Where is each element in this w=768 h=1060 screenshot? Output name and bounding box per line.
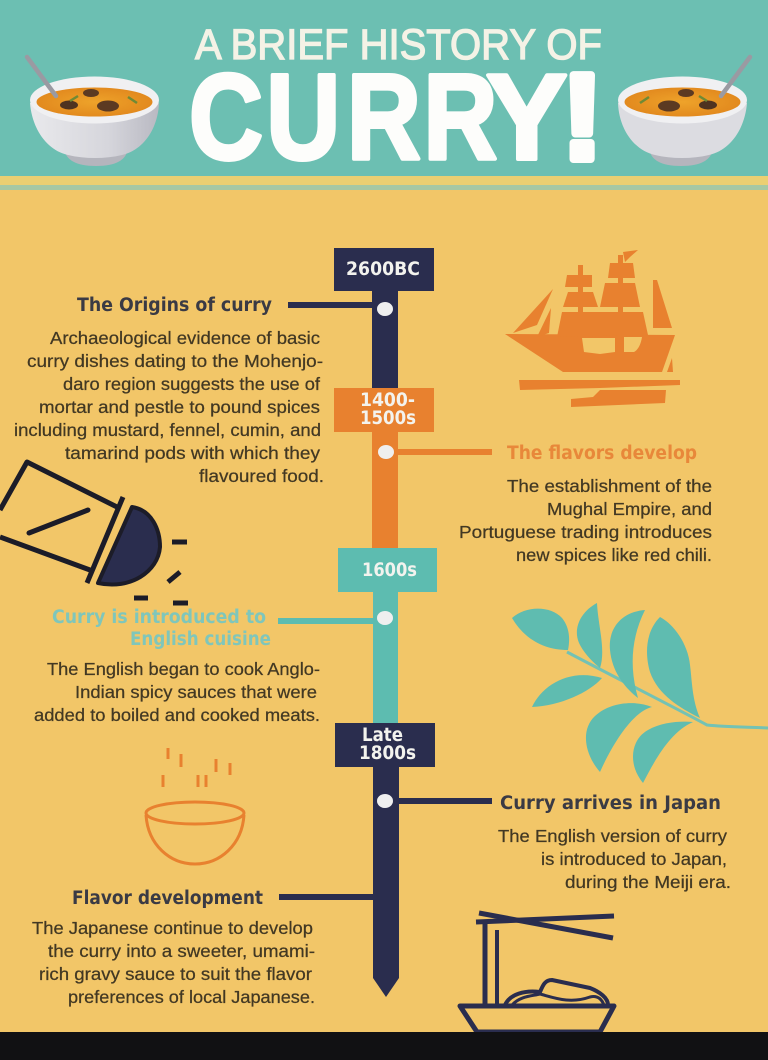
connector: flavors (398, 449, 492, 455)
date box: 1400-1500s (334, 388, 434, 432)
body text: mortar and pestle to pound spices (39, 397, 320, 417)
connector: english (278, 618, 373, 624)
connector: flavor development (279, 894, 373, 900)
heading: Curry arrives in Japan (500, 793, 721, 814)
heading: Curry is introduced to (52, 607, 266, 628)
body text (14, 328, 324, 486)
body text (32, 918, 315, 1007)
body text: curry dishes dating to the Mohenjo- (27, 351, 323, 371)
dot: english (377, 611, 393, 625)
icon: left curry bowl (27, 57, 159, 166)
body text: during the Meiji era. (565, 872, 731, 892)
title line: curry: ! (562, 49, 603, 185)
body text: new spices like red chili. (516, 545, 712, 565)
body text: The establishment of the (507, 476, 712, 496)
connector: origins (288, 302, 372, 308)
body text (34, 659, 320, 725)
connector: japan (398, 798, 492, 804)
body text: including mustard, fennel, cumin, and (14, 420, 321, 440)
timeline (278, 248, 492, 997)
date box: late 1800s: 1800s (359, 743, 416, 764)
icon: noodles and chopsticks (460, 913, 614, 1032)
body text: The English began to cook Anglo- (47, 659, 320, 679)
header banner (0, 0, 768, 190)
icon: leaf branch (512, 603, 768, 783)
body text: is introduced to Japan, (541, 849, 727, 869)
dot: flavors (378, 445, 394, 459)
body text: added to boiled and cooked meats. (34, 705, 320, 725)
timeline stem: flavors (372, 432, 398, 548)
body text: Archaeological evidence of basic (50, 328, 320, 348)
heading: Flavor development (72, 888, 263, 909)
body text: Portuguese trading introduces (459, 522, 712, 542)
body text: tamarind pods with which they (65, 443, 320, 463)
title line: curry: Y (486, 49, 567, 185)
footer bar (0, 1032, 768, 1060)
body text: daro region suggests the use of (63, 374, 320, 394)
body text (498, 826, 731, 892)
body text (459, 476, 712, 565)
title line: a brief history of: A BRIEF HISTORY OF (195, 21, 602, 69)
heading: English cuisine (130, 629, 271, 650)
body text: flavoured food. (199, 466, 324, 486)
date box: 1400-1500s: 1400- (360, 390, 415, 411)
date box: late 1800s: Late (362, 725, 403, 746)
timeline stem: origins (372, 291, 398, 388)
timeline stem: japan with arrow tip (373, 767, 399, 997)
text block: curry is introduced to english cuisine (34, 607, 320, 725)
body text: Mughal Empire, and (547, 499, 712, 519)
body text: Indian spicy sauces that were (75, 682, 317, 702)
body text: The Japanese continue to develop (32, 918, 313, 938)
body text: preferences of local Japanese. (68, 987, 315, 1007)
icon: steaming bowl (146, 748, 244, 864)
icon: sailing ship (505, 250, 680, 407)
date box: 2600BC: 2600BC (346, 259, 420, 280)
heading: The flavors develop (507, 443, 697, 464)
icon: right curry bowl (618, 57, 750, 166)
text block: flavor development (32, 888, 315, 1007)
date box: 1600s (338, 548, 437, 592)
text block: the flavors develop (459, 443, 712, 565)
body text: The English version of curry (498, 826, 727, 846)
date box: 1400-1500s: 1500s (360, 408, 416, 429)
dot: origins (377, 302, 393, 316)
body text: rich gravy sauce to suit the flavor (39, 964, 312, 984)
title (189, 21, 603, 185)
timeline stem: english (373, 592, 398, 723)
date box: 1600s: 1600s (362, 560, 417, 581)
date box: late 1800s (335, 723, 435, 767)
body text: the curry into a sweeter, umami- (48, 941, 315, 961)
text block: curry arrives in japan (498, 793, 731, 892)
heading: The Origins of curry (77, 295, 272, 316)
date box: 2600BC (334, 248, 434, 291)
title line: curry: CURR (189, 49, 497, 185)
heading (52, 607, 271, 650)
text block: the origins of curry (14, 295, 324, 486)
icon: salt shaker (0, 462, 188, 603)
dot: japan (377, 794, 393, 808)
